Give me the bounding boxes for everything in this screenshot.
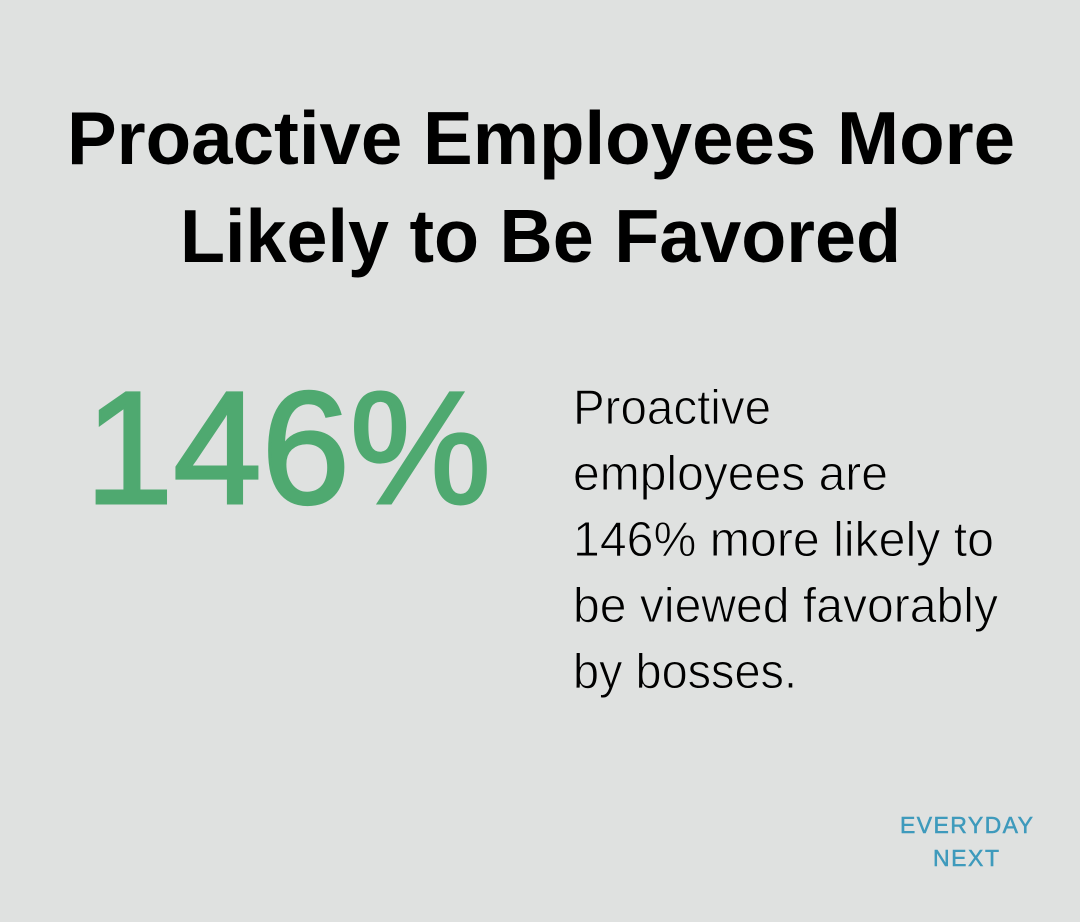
description text: [573, 381, 998, 699]
title: Likely to Be Favored: [180, 194, 901, 278]
big statistic: 146%: 146%: [85, 358, 491, 537]
description text: employees are: [573, 447, 888, 501]
title: Proactive Employees More: [67, 96, 1015, 180]
logo: Everyday Next: [900, 812, 1033, 871]
logo: Everyday Next: NEXT: [933, 845, 999, 871]
description text: 146% more likely to: [573, 513, 994, 567]
title: [67, 96, 1015, 278]
description text: be viewed favorably: [573, 579, 998, 633]
logo: Everyday Next: EVERYDAY: [900, 812, 1033, 838]
description text: Proactive: [573, 381, 771, 435]
description text: by bosses.: [573, 645, 797, 699]
